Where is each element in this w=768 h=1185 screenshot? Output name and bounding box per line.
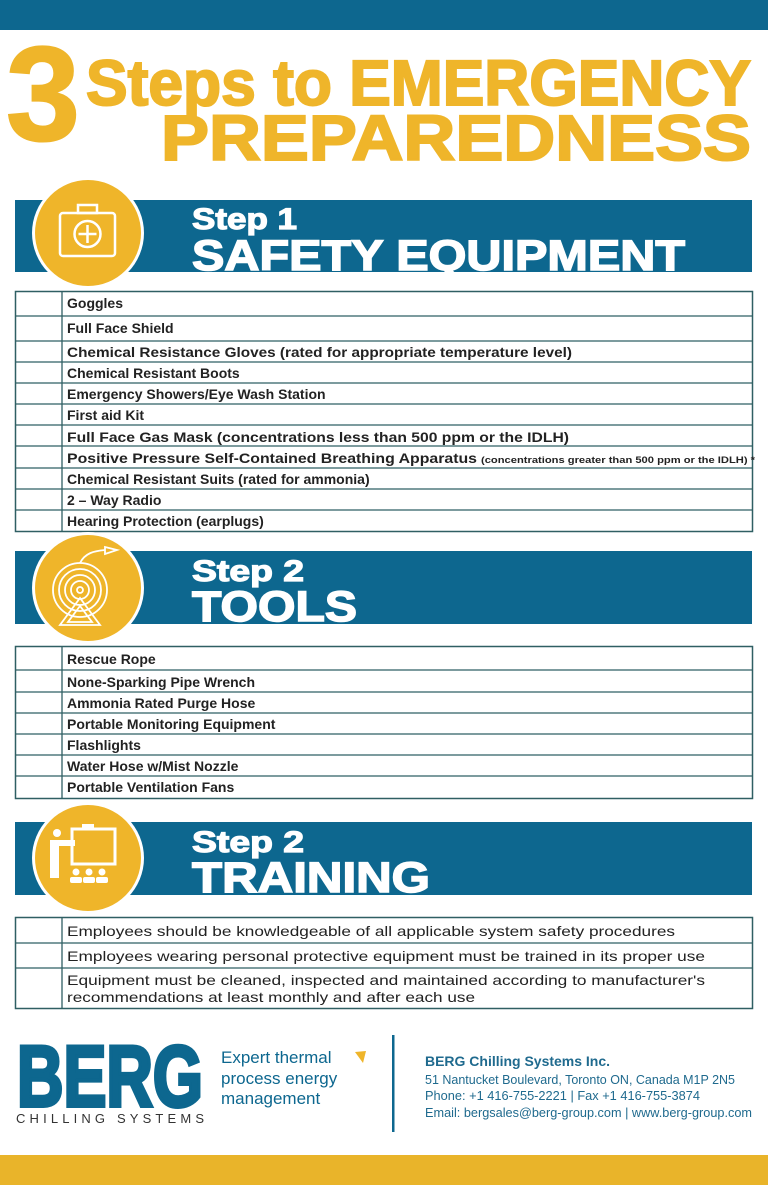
table: safety equipment: 2 – Way Radio: [67, 492, 161, 508]
top bar: [0, 0, 768, 30]
table: training: recommendations at least monthly and after each use: [67, 989, 475, 1005]
table: safety equipment: Positive Pressure Self-Contained Breathing Apparatus: [67, 450, 477, 466]
title: [6, 20, 751, 174]
step 3 header band: Step 2: [192, 826, 304, 859]
tagline: Expert thermal: [221, 1048, 332, 1067]
logo: BERG: BERG: [17, 1029, 203, 1125]
title: 3: [6, 20, 80, 169]
step 1 header band: SAFETY EQUIPMENT: [192, 232, 685, 280]
table: safety equipment: [15, 291, 755, 532]
bottom bar: [0, 1155, 768, 1185]
step 2 header band: Step 2: [192, 555, 304, 588]
table: safety equipment: First aid Kit: [67, 407, 144, 423]
table: tools: Water Hose w/Mist Nozzle: [67, 758, 239, 774]
table: training: [15, 917, 753, 1008]
contact info: 51 Nantucket Boulevard, Toronto ON, Canada M1P 2N5: [425, 1073, 735, 1087]
table: training: Equipment must be cleaned, inspected and maintained according to manufacturer's: [67, 972, 705, 988]
contact info: Email: bergsales@berg-group.com | www.berg-group.com: [425, 1106, 752, 1120]
table: training: Employees should be knowledgeable of all applicable system safety procedures: [67, 923, 675, 939]
contact info: [425, 1053, 752, 1120]
table: safety equipment: Full Face Shield: [67, 320, 174, 336]
table: tools: Portable Monitoring Equipment: [67, 716, 276, 732]
table: safety equipment: Chemical Resistant Suits (rated for ammonia): [67, 471, 370, 487]
contact info: Phone: +1 416-755-2221 | Fax +1 416-755-3874: [425, 1089, 700, 1103]
icon: training: [32, 802, 144, 914]
icon: hose reel: [32, 532, 144, 644]
table: safety equipment: Emergency Showers/Eye Wash Station: [67, 386, 326, 402]
table: safety equipment: Chemical Resistant Boots: [67, 365, 240, 381]
logo: BERG: CHILLING SYSTEMS: [16, 1111, 204, 1126]
step 3 header band: TRAINING: [192, 854, 430, 902]
step 1 header band: [15, 200, 752, 280]
divider line: [392, 1035, 394, 1132]
title: Steps to EMERGENCY: [86, 47, 751, 119]
step 2 header band: [15, 551, 752, 631]
table: tools: Portable Ventilation Fans: [67, 779, 234, 795]
table: safety equipment: Goggles: [67, 295, 123, 311]
step 2 header band: TOOLS: [192, 583, 357, 631]
table: tools: Rescue Rope: [67, 651, 156, 667]
table: training: Employees wearing personal protective equipment must be trained in its proper use: [67, 948, 705, 964]
contact info: BERG Chilling Systems Inc.: [425, 1053, 610, 1069]
table: safety equipment: Full Face Gas Mask (concentrations less than 500 ppm or the IDLH): [67, 429, 569, 445]
tagline: process energy: [221, 1069, 338, 1088]
table: tools: None-Sparking Pipe Wrench: [67, 674, 255, 690]
tagline: management: [221, 1089, 321, 1108]
step 1 header band: Step 1: [192, 203, 297, 236]
table: tools: [15, 646, 753, 798]
table: safety equipment: (concentrations greater than 500 ppm or the IDLH) *: [481, 455, 755, 466]
title: PREPAREDNESS: [161, 102, 751, 174]
table: safety equipment: Hearing Protection (earplugs): [67, 513, 264, 529]
table: tools: Ammonia Rated Purge Hose: [67, 695, 255, 711]
table: tools: Flashlights: [67, 737, 141, 753]
table: safety equipment: Chemical Resistance Gloves (rated for appropriate temperature level): [67, 344, 572, 360]
icon: first aid kit: [32, 177, 144, 289]
tagline: [221, 1048, 366, 1108]
step 3 header band: [15, 822, 752, 902]
